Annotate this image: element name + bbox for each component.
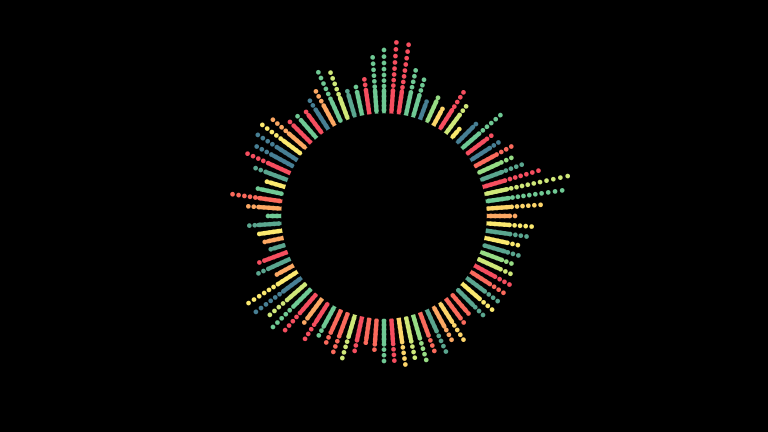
bar 16 xyxy=(450,143,514,182)
bar 49 xyxy=(339,290,364,361)
bar 55 xyxy=(282,275,334,333)
bar 14 xyxy=(439,132,495,176)
bar 18 xyxy=(456,162,525,191)
bar 52 xyxy=(316,278,352,339)
bar 15 xyxy=(443,139,502,179)
bar 63 xyxy=(268,231,326,252)
bar 13 xyxy=(444,112,504,165)
bar 42 xyxy=(398,290,418,360)
bar 85 xyxy=(344,88,367,151)
bar 23 xyxy=(453,214,517,218)
bar 71 xyxy=(264,179,323,200)
bar 57 xyxy=(267,266,325,318)
bar 39 xyxy=(414,286,449,355)
bar 51 xyxy=(323,281,356,346)
bar 44 xyxy=(387,292,397,363)
bar 2 xyxy=(388,40,399,124)
bar 36 xyxy=(424,270,467,326)
bar 74 xyxy=(254,143,318,182)
bar 54 xyxy=(301,270,344,326)
bar 45 xyxy=(382,292,386,363)
bar 50 xyxy=(330,287,360,355)
bar 66 xyxy=(247,219,314,228)
bar 48 xyxy=(352,286,371,354)
bar 32 xyxy=(442,259,501,304)
bar 77 xyxy=(270,116,327,167)
bar 24 xyxy=(462,219,534,229)
bar 58 xyxy=(253,265,318,315)
bar 22 xyxy=(466,202,543,212)
bar 4 xyxy=(398,68,418,140)
bar 8 xyxy=(413,106,446,161)
bar 37 xyxy=(424,280,467,343)
bar 26 xyxy=(454,229,521,248)
bar 10 xyxy=(425,103,469,160)
bar 38 xyxy=(417,280,455,343)
bar 83 xyxy=(315,69,352,141)
bar 62 xyxy=(256,238,319,265)
bar 53 xyxy=(302,279,344,342)
bar 73 xyxy=(244,151,313,185)
bar 9 xyxy=(424,89,467,152)
bar 82 xyxy=(313,88,350,152)
bar 19 xyxy=(465,168,541,194)
inner black circle xyxy=(281,113,487,319)
bar 7 xyxy=(410,95,441,155)
bar 40 xyxy=(408,286,437,354)
bar 30 xyxy=(449,250,513,288)
bar 41 xyxy=(404,291,429,363)
bar 76 xyxy=(259,122,321,170)
bar 28 xyxy=(450,239,514,267)
bar 84 xyxy=(328,70,358,141)
bar 78 xyxy=(287,119,336,168)
bar 43 xyxy=(393,294,408,367)
bar 56 xyxy=(270,273,327,330)
bar 68 xyxy=(246,204,313,213)
bar 20 xyxy=(481,173,571,197)
bar 70 xyxy=(255,186,318,204)
bar 5 xyxy=(403,77,427,145)
bar 21 xyxy=(478,188,565,205)
bar 79 xyxy=(294,113,340,165)
bar 35 xyxy=(426,266,472,317)
bar 47 xyxy=(363,282,377,345)
bar 81 xyxy=(307,98,347,157)
bar 72 xyxy=(253,165,317,193)
bar 60 xyxy=(274,245,329,278)
bar 65 xyxy=(257,223,319,237)
bar 1 xyxy=(382,48,386,128)
bar 12 xyxy=(430,121,479,170)
bar 3 xyxy=(395,42,411,126)
bar 25 xyxy=(459,224,529,239)
bar 87 xyxy=(362,77,376,145)
bar 80 xyxy=(303,109,345,163)
bar 88 xyxy=(370,55,380,133)
bar 29 xyxy=(449,244,514,277)
bar 31 xyxy=(445,254,507,296)
bar 59 xyxy=(245,260,314,306)
bar 34 xyxy=(434,266,486,318)
bar 75 xyxy=(255,132,319,175)
bar 67 xyxy=(266,214,323,218)
bar 86 xyxy=(353,84,372,149)
bar 69 xyxy=(230,192,305,207)
bar 6 xyxy=(404,99,430,157)
bar 17 xyxy=(450,155,514,188)
bar 33 xyxy=(439,263,495,313)
bar 64 xyxy=(262,227,322,245)
bar 11 xyxy=(422,126,463,172)
bar 61 xyxy=(255,244,319,276)
bar 46 xyxy=(372,286,381,352)
bar 27 xyxy=(454,234,521,258)
